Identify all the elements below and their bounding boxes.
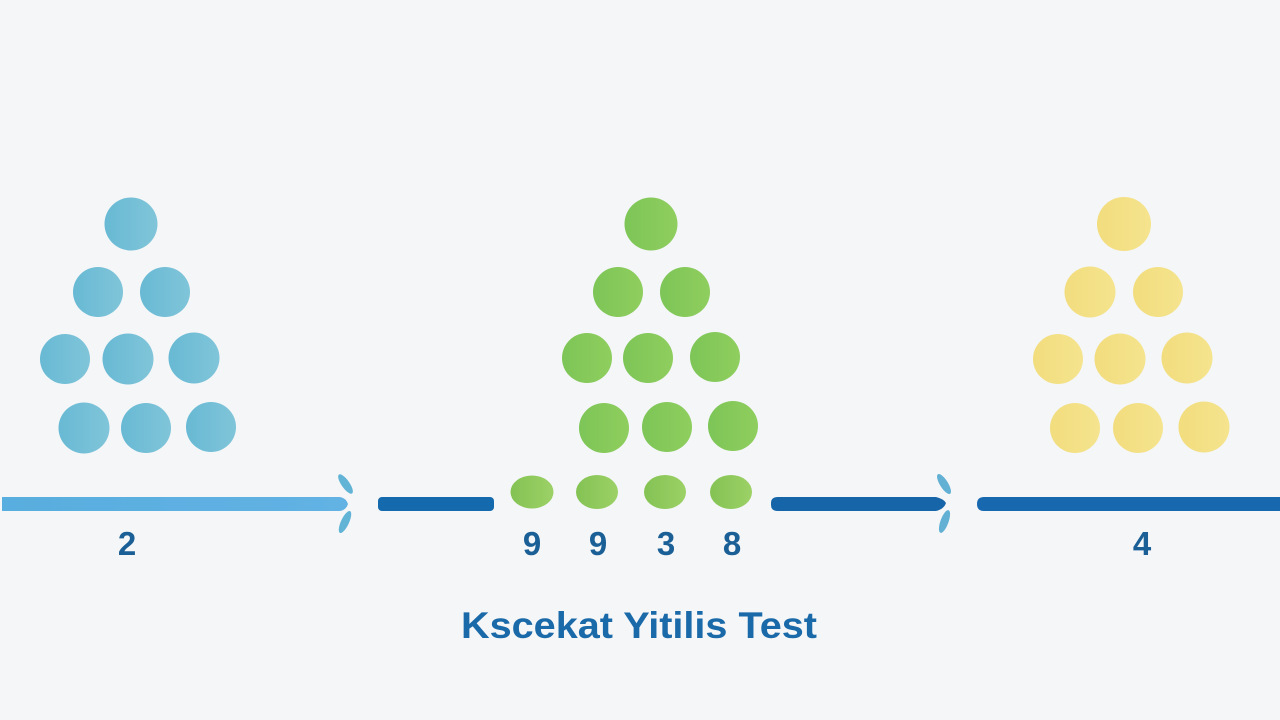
axis labels: 9 — [523, 525, 541, 562]
axis labels: 3 — [657, 525, 675, 562]
axis labels: 4 — [1133, 525, 1152, 562]
yellow dot group — [1033, 197, 1230, 453]
arrow: light blue — [2, 472, 355, 535]
line segment: dark blue — [378, 497, 494, 511]
title: Kscekat Yitilis Test — [461, 605, 817, 646]
axis labels: 2 — [118, 525, 136, 562]
arrow: dark blue — [771, 472, 953, 534]
blue dot group — [40, 198, 236, 454]
axis labels: 8 — [723, 525, 741, 562]
axis labels: 9 — [589, 525, 607, 562]
green dot group — [510, 198, 758, 509]
line segment: long blue — [977, 497, 1280, 511]
axis labels — [118, 525, 1152, 562]
